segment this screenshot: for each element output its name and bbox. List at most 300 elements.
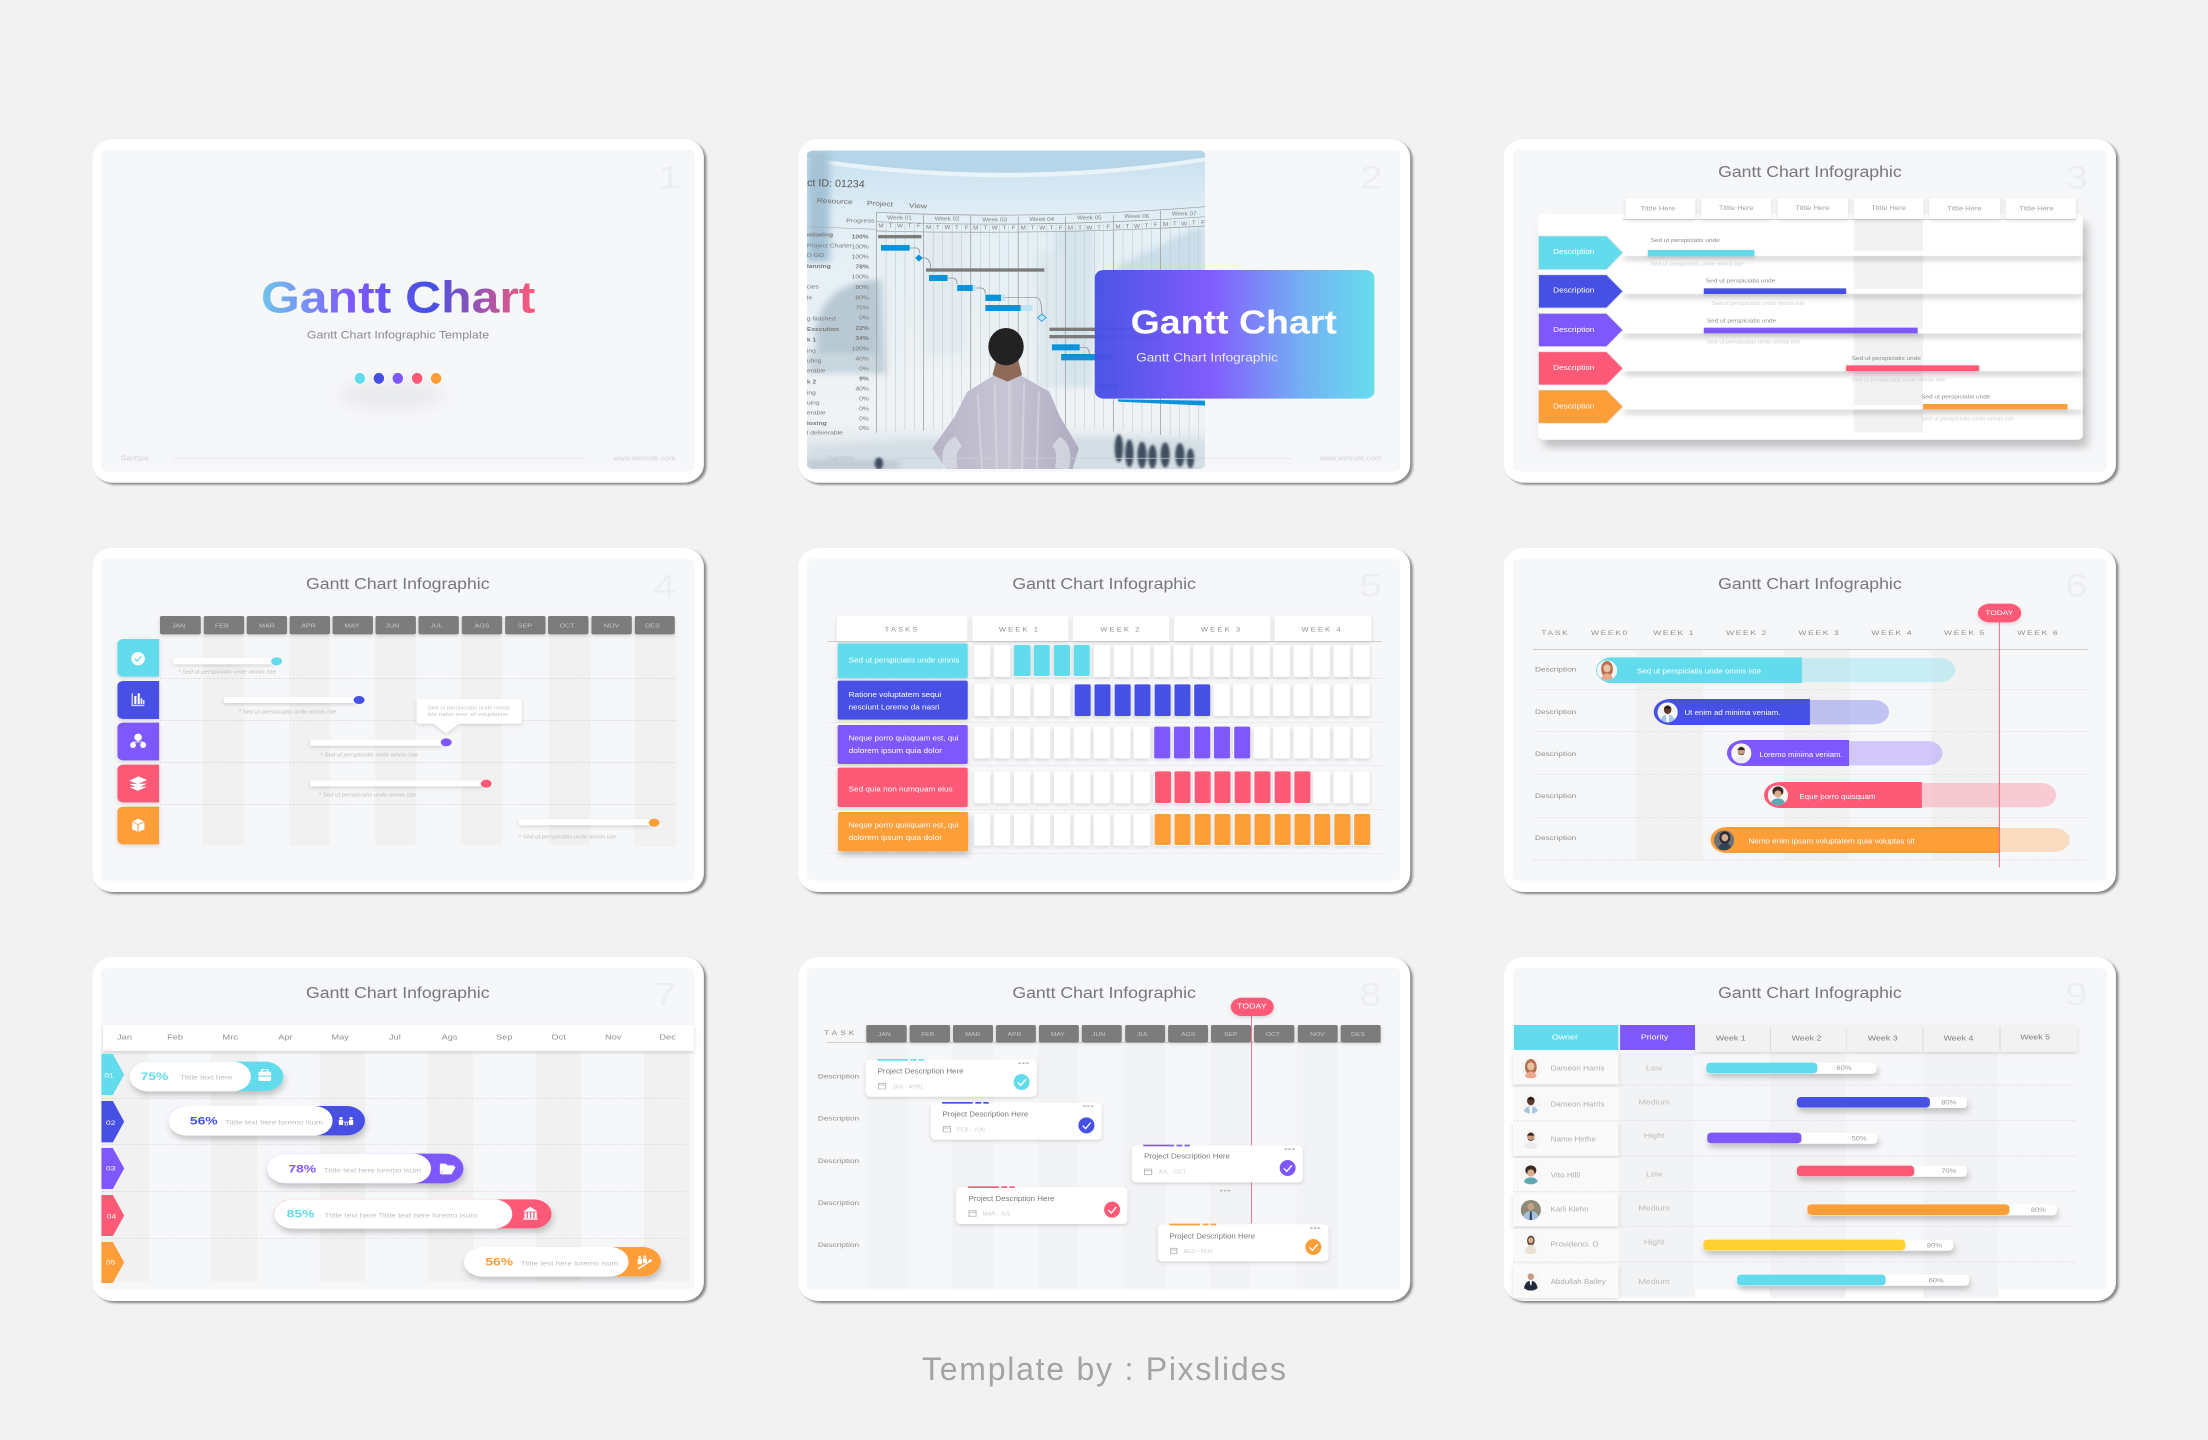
- photo: man viewing a projected gantt chart: M: [1068, 226, 1073, 231]
- panel 8: project cards gantt: [799, 957, 1410, 1301]
- progress row 2: Ut enim ad minima veniam.: [1684, 709, 1780, 717]
- photo: man viewing a projected gantt chart: T: [908, 224, 912, 229]
- table row 1: Low: [1646, 1065, 1663, 1072]
- pill row 4: [101, 1195, 551, 1236]
- icon: briefcase: [258, 1070, 271, 1081]
- slide inner background: [1513, 559, 2107, 881]
- slide inner background: [101, 150, 695, 472]
- table headers: WEEK 3: [1201, 627, 1242, 633]
- progress row 5: [1535, 827, 2070, 853]
- month headers: JUL: [430, 623, 443, 629]
- month headers: APR: [301, 623, 316, 629]
- photo: man viewing a projected gantt chart: M: [878, 224, 884, 229]
- slide inner background: [101, 968, 695, 1290]
- photo: man viewing a projected gantt chart: k 1: [807, 338, 817, 343]
- photo: man viewing a projected gantt chart: 100%: [852, 255, 869, 260]
- slide number: 6: [2065, 567, 2088, 603]
- week headers: WEEK 2: [1726, 629, 1768, 637]
- slide inner background: [101, 559, 695, 881]
- month headers: MAY: [1051, 1032, 1065, 1038]
- icon: stack of books: [117, 765, 159, 802]
- pill row 3: Tittle text here loremo isum: [324, 1166, 421, 1174]
- project card 5: AGS - NOV: [1184, 1249, 1214, 1255]
- photo: man viewing a projected gantt chart: 0%: [859, 417, 869, 422]
- pill row 5: 56%: [485, 1256, 513, 1268]
- icon: package: [117, 807, 159, 844]
- photo: man viewing a projected gantt chart: W: [945, 225, 951, 231]
- month headers: NOV: [1310, 1032, 1326, 1038]
- milestone row 5: [519, 819, 660, 840]
- month headers: MAY: [344, 623, 360, 629]
- photo: man viewing a projected gantt chart: Week 05: [1077, 216, 1102, 221]
- icon: bar chart: [117, 681, 159, 719]
- slide number: 8: [1359, 976, 1382, 1012]
- month headers: JUN: [1092, 1032, 1105, 1038]
- photo: man viewing a projected gantt chart: M: [1115, 225, 1121, 230]
- project card 4: Project Description Here: [969, 1195, 1055, 1203]
- milestone row 1: [173, 657, 282, 675]
- progress row 1: [1535, 657, 1955, 683]
- slide frame: [93, 957, 704, 1301]
- project card 2: [931, 1102, 1102, 1140]
- heading: Gantt Chart Infographic: [1012, 575, 1196, 593]
- month headers: FEB: [215, 623, 229, 629]
- photo: man viewing a projected gantt chart: T: [1078, 226, 1083, 231]
- photo: man viewing a projected gantt chart: Week 06: [1125, 214, 1149, 220]
- project card 5: [1158, 1224, 1328, 1261]
- row labels: [818, 1073, 859, 1249]
- row 1: [1538, 236, 1754, 270]
- photo: man viewing a projected gantt chart: le: [807, 296, 813, 301]
- photo: man viewing a projected gantt chart: 100%: [852, 245, 869, 250]
- row dividers: [102, 1098, 685, 1238]
- progress row 4: [1535, 782, 2056, 808]
- project card 1: JAN - APRL: [892, 1084, 924, 1090]
- slide frame: [1504, 957, 2116, 1301]
- column headers: Tittle Here: [1871, 206, 1906, 212]
- progress row 1: Description: [1535, 666, 1576, 673]
- progress row 3: Description: [1535, 750, 1576, 758]
- row 2: Description: [1553, 287, 1594, 294]
- row 3: Description: [1553, 326, 1594, 334]
- footer: www.website.com: [1319, 455, 1381, 462]
- month headers: JUN: [385, 623, 400, 629]
- photo: man viewing a projected gantt chart: 0%: [859, 367, 869, 372]
- pill row 2: [101, 1101, 365, 1142]
- slide frame: [1504, 139, 2116, 483]
- photo: man viewing a projected gantt chart: F: [1154, 223, 1158, 228]
- slide number: 9: [2065, 976, 2088, 1012]
- track lines: [1623, 251, 2081, 409]
- month headers: MAR: [965, 1032, 981, 1038]
- row 4: Sed ut perspiciatis unde omnis iste: [1852, 378, 1946, 383]
- photo: man viewing a projected gantt chart: T: [1031, 226, 1035, 231]
- photo: man viewing a projected gantt chart: 0%: [859, 397, 869, 402]
- panel 3: arrow timeline gantt: [1504, 139, 2116, 483]
- title card heading: Gantt Chart: [1131, 304, 1337, 341]
- month column bands: [101, 1052, 689, 1282]
- panel 4: monthly milestones gantt: [93, 548, 704, 892]
- project card 1: •••: [1018, 1059, 1030, 1067]
- photo: man viewing a projected gantt chart: 0%: [859, 316, 869, 321]
- column headers: Tittle Here: [1947, 206, 1982, 212]
- pill row 2: 02: [106, 1119, 115, 1127]
- table row 6: [1521, 1234, 1953, 1254]
- photo: man viewing a projected gantt chart: nitiating: [807, 233, 833, 238]
- row 5: [1538, 390, 2068, 423]
- slide inner background: [1513, 150, 2107, 472]
- month header bar: Apr: [278, 1033, 293, 1041]
- pill row 3: 03: [106, 1165, 115, 1172]
- photo: man viewing a projected gantt chart: View: [909, 202, 928, 210]
- pill row 4: Tittle text here Tittle text here loremo isum: [325, 1211, 477, 1219]
- table row 5: Karli Klehn: [1551, 1205, 1588, 1213]
- photo: man viewing a projected gantt chart: W: [1134, 224, 1141, 230]
- photo: man viewing a projected gantt chart: 100%: [852, 275, 869, 280]
- month headers: AGS: [474, 623, 490, 629]
- photo: man viewing a projected gantt chart: losing: [807, 421, 827, 427]
- progress row 5: Nemo enim ipsam voluptatem quia voluptas sit: [1748, 838, 1915, 845]
- table row 2: Dameon Harris: [1551, 1100, 1604, 1108]
- project card 3: Project Description Here: [1144, 1153, 1231, 1160]
- photo: man viewing a projected gantt chart: 100%: [852, 347, 869, 352]
- row dividers: [160, 679, 676, 804]
- heading: Gantt Chart Infographic: [1718, 984, 1902, 1002]
- cover subtitle: Gantt Chart Infographic Template: [307, 329, 489, 341]
- month header bar: Sep: [496, 1033, 513, 1041]
- table row 2: Medium: [1638, 1098, 1670, 1106]
- table row 1: 60%: [1836, 1066, 1852, 1072]
- slide frame: [1504, 548, 2116, 892]
- white chart sheet: [1538, 214, 2083, 440]
- task row 5: dolorem ipsum quia dolor: [849, 834, 942, 842]
- pill row 4: 04: [107, 1212, 116, 1220]
- table row 7: [1521, 1271, 1969, 1291]
- month headers: [866, 1025, 1381, 1042]
- progress row 4: Description: [1535, 792, 1576, 800]
- row 4: Sed ut perspiciatis unde: [1852, 356, 1921, 362]
- project card 1: Project Description Here: [878, 1067, 964, 1075]
- photo: man viewing a projected gantt chart: uting: [807, 359, 822, 364]
- photo: man viewing a projected gantt chart: Project Charter: [807, 244, 852, 249]
- photo: man viewing a projected gantt chart: F: [1059, 226, 1063, 231]
- photo: man viewing a projected gantt chart: ing: [807, 391, 816, 396]
- table row 6: Hight: [1644, 1238, 1665, 1246]
- photo: man viewing a projected gantt chart: T: [936, 225, 940, 231]
- photo: man viewing a projected gantt chart: T: [1192, 221, 1196, 226]
- month header bar: [103, 1025, 694, 1051]
- milestone row 1: * Sed ut perspiciatis unde omnis iste: [178, 670, 276, 675]
- project card 1: [866, 1059, 1037, 1097]
- month headers: AGS: [1181, 1032, 1195, 1038]
- footer: www.website.com: [612, 455, 676, 462]
- progress row 3: Loremo minima veniam.: [1759, 751, 1843, 759]
- month headers: MAR: [259, 623, 275, 629]
- week headers: WEEK 3: [1799, 629, 1840, 637]
- photo: man viewing a projected gantt chart: l deliverable: [807, 431, 844, 436]
- table row 5: 80%: [2031, 1208, 2046, 1214]
- table headers: [827, 616, 1382, 642]
- photo: man viewing a projected gantt chart: uing: [807, 401, 820, 406]
- table row 4: 70%: [1941, 1169, 1956, 1175]
- project card 3: [1132, 1145, 1303, 1182]
- row 4: Description: [1553, 364, 1594, 372]
- project card 4: •••: [1219, 1187, 1231, 1195]
- photo: man viewing a projected gantt chart: Week 02: [935, 217, 959, 222]
- callout: Sed ut perspiciatis unde omnis: [428, 706, 510, 711]
- table headers: Owner: [1552, 1034, 1578, 1041]
- project card 5: •••: [1310, 1224, 1321, 1232]
- photo: man viewing a projected gantt chart: ing: [807, 349, 816, 354]
- table headers: WEEK 4: [1302, 627, 1343, 633]
- month headers: [160, 616, 675, 634]
- week headers: [1533, 629, 2088, 650]
- slide frame: [799, 548, 1410, 892]
- month headers: FEB: [921, 1032, 934, 1038]
- column headers: Tittle Here: [1641, 206, 1675, 212]
- photo: man viewing a projected gantt chart: Ganttpix: [827, 455, 855, 462]
- photo: man viewing a projected gantt chart: Progress: [846, 218, 875, 224]
- table headers: Week 3: [1868, 1034, 1898, 1042]
- panel 6: progress bars with avatars: [1504, 548, 2116, 892]
- photo: man viewing a projected gantt chart: F: [917, 224, 921, 229]
- pill row 2: Tittle text here loremo isum: [225, 1118, 323, 1126]
- photo: man viewing a projected gantt chart: 40%: [855, 387, 869, 392]
- photo: man viewing a projected gantt chart: Resource: [817, 197, 853, 206]
- month column bands: [203, 635, 676, 847]
- slide number: 1: [658, 159, 681, 195]
- photo: man viewing a projected gantt chart: Week 04: [1029, 217, 1054, 223]
- project card 5: Project Description Here: [1169, 1232, 1256, 1240]
- pill row 5: [101, 1242, 661, 1283]
- heading: Gantt Chart Infographic: [1012, 984, 1196, 1002]
- photo: man viewing a projected gantt chart: W: [1181, 222, 1188, 227]
- row 1: Sed ut perspiciatis unde: [1650, 238, 1720, 244]
- callout: iste natus error sit voluptatem: [428, 712, 508, 718]
- heading: Gantt Chart Infographic: [306, 984, 490, 1002]
- column headers: Tittle Here: [1795, 206, 1830, 212]
- table headers: TASKS: [885, 627, 919, 633]
- month header bar: Nov: [605, 1033, 622, 1041]
- task row 3: [838, 725, 1250, 764]
- month header bar: Jan: [117, 1033, 132, 1041]
- row 5: Sed ut perspiciatis unde: [1921, 394, 1991, 400]
- task row 3: Neque porro quisquam est, qui: [849, 735, 959, 742]
- slide frame: [93, 548, 704, 892]
- milestone row 3: [311, 738, 452, 758]
- photo: man viewing a projected gantt chart: T: [1125, 224, 1130, 230]
- week column bands: [1636, 650, 1999, 860]
- photo: man viewing a projected gantt chart: k 2: [807, 380, 817, 385]
- row 3: Sed ut perspiciatis unde omnis iste: [1707, 340, 1801, 345]
- pill row 3: [101, 1148, 463, 1189]
- progress row 5: Description: [1535, 834, 1576, 842]
- photo: man viewing a projected gantt chart: 100%: [852, 235, 869, 240]
- icon: team growth: [637, 1255, 652, 1269]
- slide inner background: [807, 150, 1400, 472]
- table row 5: [1521, 1200, 2057, 1220]
- task row 2: [838, 681, 1210, 720]
- pill row 1: 75%: [141, 1070, 168, 1083]
- slide number: 3: [2066, 159, 2088, 195]
- pill row 4: 85%: [287, 1208, 314, 1220]
- pill row 2: 56%: [190, 1115, 218, 1127]
- table row 6: 80%: [1927, 1243, 1942, 1249]
- week headers: WEEK 1: [1653, 629, 1695, 637]
- row labels: Description: [818, 1157, 859, 1165]
- panel 2: photo slide: [799, 139, 1410, 483]
- photo: man viewing a projected gantt chart: Week 03: [982, 218, 1007, 223]
- week headers: TASK: [1541, 629, 1569, 637]
- photo: man viewing a projected gantt chart: erable: [807, 411, 826, 416]
- row 5: Description: [1553, 403, 1594, 410]
- table headers: Priority: [1641, 1034, 1668, 1041]
- slide frame: [799, 139, 1410, 483]
- month header bar: Oct: [551, 1033, 567, 1041]
- month header bar: Ags: [442, 1033, 458, 1041]
- photo: man viewing a projected gantt chart: M: [1021, 226, 1026, 231]
- photo: man viewing a projected gantt chart: 22%: [855, 326, 869, 332]
- row 4: [1538, 352, 1979, 385]
- row 1: Sed ut perspiciatis unde omnis iste: [1650, 262, 1744, 267]
- week headers: WEEK 4: [1871, 629, 1913, 637]
- month headers: APR: [1008, 1032, 1022, 1038]
- row 2: [1538, 275, 1846, 308]
- cover title: Gantt Chart: [261, 272, 535, 322]
- month headers: NOV: [604, 623, 620, 629]
- photo: man viewing a projected gantt chart: 34%: [855, 336, 869, 342]
- task row 4: Sed quia non numquam eius: [849, 786, 953, 793]
- progress row 3: [1535, 740, 1942, 766]
- month headers: DES: [1351, 1032, 1365, 1038]
- photo: man viewing a projected gantt chart: T: [983, 226, 988, 231]
- milestone row 4: * Sed ut perspiciatis unde omnis iste: [319, 793, 417, 798]
- photo: man viewing a projected gantt chart: Week 07: [1172, 212, 1196, 217]
- week headers: WEEK0: [1591, 629, 1629, 637]
- table headers: WEEK 1: [999, 627, 1040, 633]
- row 3: [1538, 313, 1918, 347]
- row 2: Sed ut perspiciatis unde: [1706, 278, 1776, 284]
- photo: man viewing a projected gantt chart: cies: [807, 285, 819, 290]
- table row 7: Abdullah Bailey: [1551, 1278, 1606, 1286]
- photo: man viewing a projected gantt chart: g finished: [807, 317, 836, 322]
- table row 5: Medium: [1638, 1205, 1670, 1212]
- slide frame: [799, 957, 1410, 1301]
- title card subheading: Gantt Chart Infographic: [1136, 350, 1278, 364]
- month header bar: Feb: [167, 1033, 183, 1041]
- row labels: Description: [818, 1073, 859, 1080]
- photo: man viewing a projected gantt chart: W: [897, 224, 904, 229]
- today marker: TODAY: [1237, 1003, 1267, 1010]
- photo: man viewing a projected gantt chart: T: [955, 225, 959, 231]
- color dots: [339, 372, 444, 410]
- month header bar: Jul: [389, 1033, 401, 1041]
- month column bands: [867, 1047, 1338, 1288]
- photo: man viewing a projected gantt chart: T: [1050, 226, 1054, 231]
- table row 2: 80%: [1941, 1100, 1956, 1106]
- panel 7: percentage pills gantt: [93, 957, 704, 1301]
- photo: man viewing a projected gantt chart: [807, 151, 1206, 469]
- slide number: 2: [1360, 159, 1383, 195]
- project card 2: Project Description Here: [942, 1110, 1029, 1118]
- table headers: Week 4: [1944, 1034, 1974, 1042]
- icon: check: [117, 639, 159, 677]
- milestone row 3: * Sed ut perspiciatis unde omnis iste: [320, 753, 419, 758]
- week cells: [974, 645, 1370, 846]
- progress row 4: Eque porro quisquam: [1799, 793, 1876, 801]
- project card 2: •••: [1083, 1102, 1094, 1110]
- panel 9: owner and priority table gantt: [1504, 957, 2116, 1301]
- task row 1: Sed ut perspiciatis unde omnis: [849, 657, 959, 664]
- month header bar: Dec: [659, 1033, 676, 1041]
- photo: man viewing a projected gantt chart: F: [1012, 226, 1016, 231]
- column headers: Tittle Here: [1719, 206, 1754, 212]
- photo: man viewing a projected gantt chart: W: [1039, 226, 1046, 231]
- month headers: SEP: [1224, 1032, 1238, 1038]
- row labels: Description: [818, 1241, 859, 1249]
- table row 3: Name Hirthe: [1551, 1136, 1597, 1143]
- today marker: [1978, 604, 2021, 867]
- slide number: 4: [653, 568, 676, 604]
- milestone row 2: [224, 696, 365, 715]
- month headers: SEP: [518, 623, 532, 629]
- footer: [121, 455, 676, 462]
- table row 4: [1521, 1164, 1967, 1184]
- pill row 1: Tittle text here: [180, 1074, 232, 1081]
- table headers: WEEK 2: [1100, 627, 1142, 633]
- photo: man viewing a projected gantt chart: T: [1173, 222, 1177, 227]
- month headers: DES: [645, 623, 660, 629]
- table headers: [1514, 1025, 2077, 1052]
- pill row 5: 05: [106, 1258, 115, 1266]
- icon: meeting people: [339, 1117, 353, 1126]
- task row 5: [838, 812, 1370, 851]
- task row 1: [838, 643, 1090, 678]
- table headers: Week 2: [1792, 1034, 1822, 1042]
- today marker: [1231, 998, 1274, 1223]
- heading: Gantt Chart Infographic: [1718, 575, 1902, 593]
- week headers: WEEK 6: [2017, 629, 2059, 637]
- photo: man viewing a projected gantt chart: 75%: [855, 306, 869, 311]
- month header bar: Mrc: [223, 1033, 238, 1041]
- photo: man viewing a projected gantt chart: 80%: [855, 285, 869, 291]
- table row 7: Medium: [1638, 1278, 1670, 1286]
- photo: man viewing a projected gantt chart: D GO: [807, 253, 824, 259]
- row labels: Description: [818, 1115, 859, 1122]
- pill row 1: [101, 1054, 283, 1095]
- project card 4: MAR - JUL: [982, 1211, 1011, 1217]
- photo: man viewing a projected gantt chart: lanning: [807, 264, 831, 270]
- photo: man viewing a projected gantt chart: M: [926, 225, 931, 231]
- photo: man viewing a projected gantt chart: 0%: [859, 407, 869, 412]
- month headers: OCT: [1266, 1032, 1280, 1038]
- today marker: TODAY: [1985, 609, 2013, 617]
- row labels: Description: [818, 1199, 859, 1207]
- task row 2: nesciunt Loremo da nasri: [849, 703, 940, 711]
- table headers: Week 1: [1716, 1034, 1746, 1042]
- photo: man viewing a projected gantt chart: F: [965, 226, 969, 231]
- slide inner background: [807, 559, 1400, 881]
- table row 2: [1521, 1094, 1967, 1114]
- photo: man viewing a projected gantt chart: 80%: [855, 296, 869, 301]
- icon: folder: [440, 1164, 455, 1174]
- icon: network: [117, 723, 159, 760]
- month headers: OCT: [559, 623, 575, 629]
- footer: Ganttpix: [121, 455, 149, 462]
- progress row 2: [1535, 699, 1889, 725]
- slide number: 7: [654, 976, 677, 1012]
- table row 6: Providenci. O: [1551, 1241, 1599, 1248]
